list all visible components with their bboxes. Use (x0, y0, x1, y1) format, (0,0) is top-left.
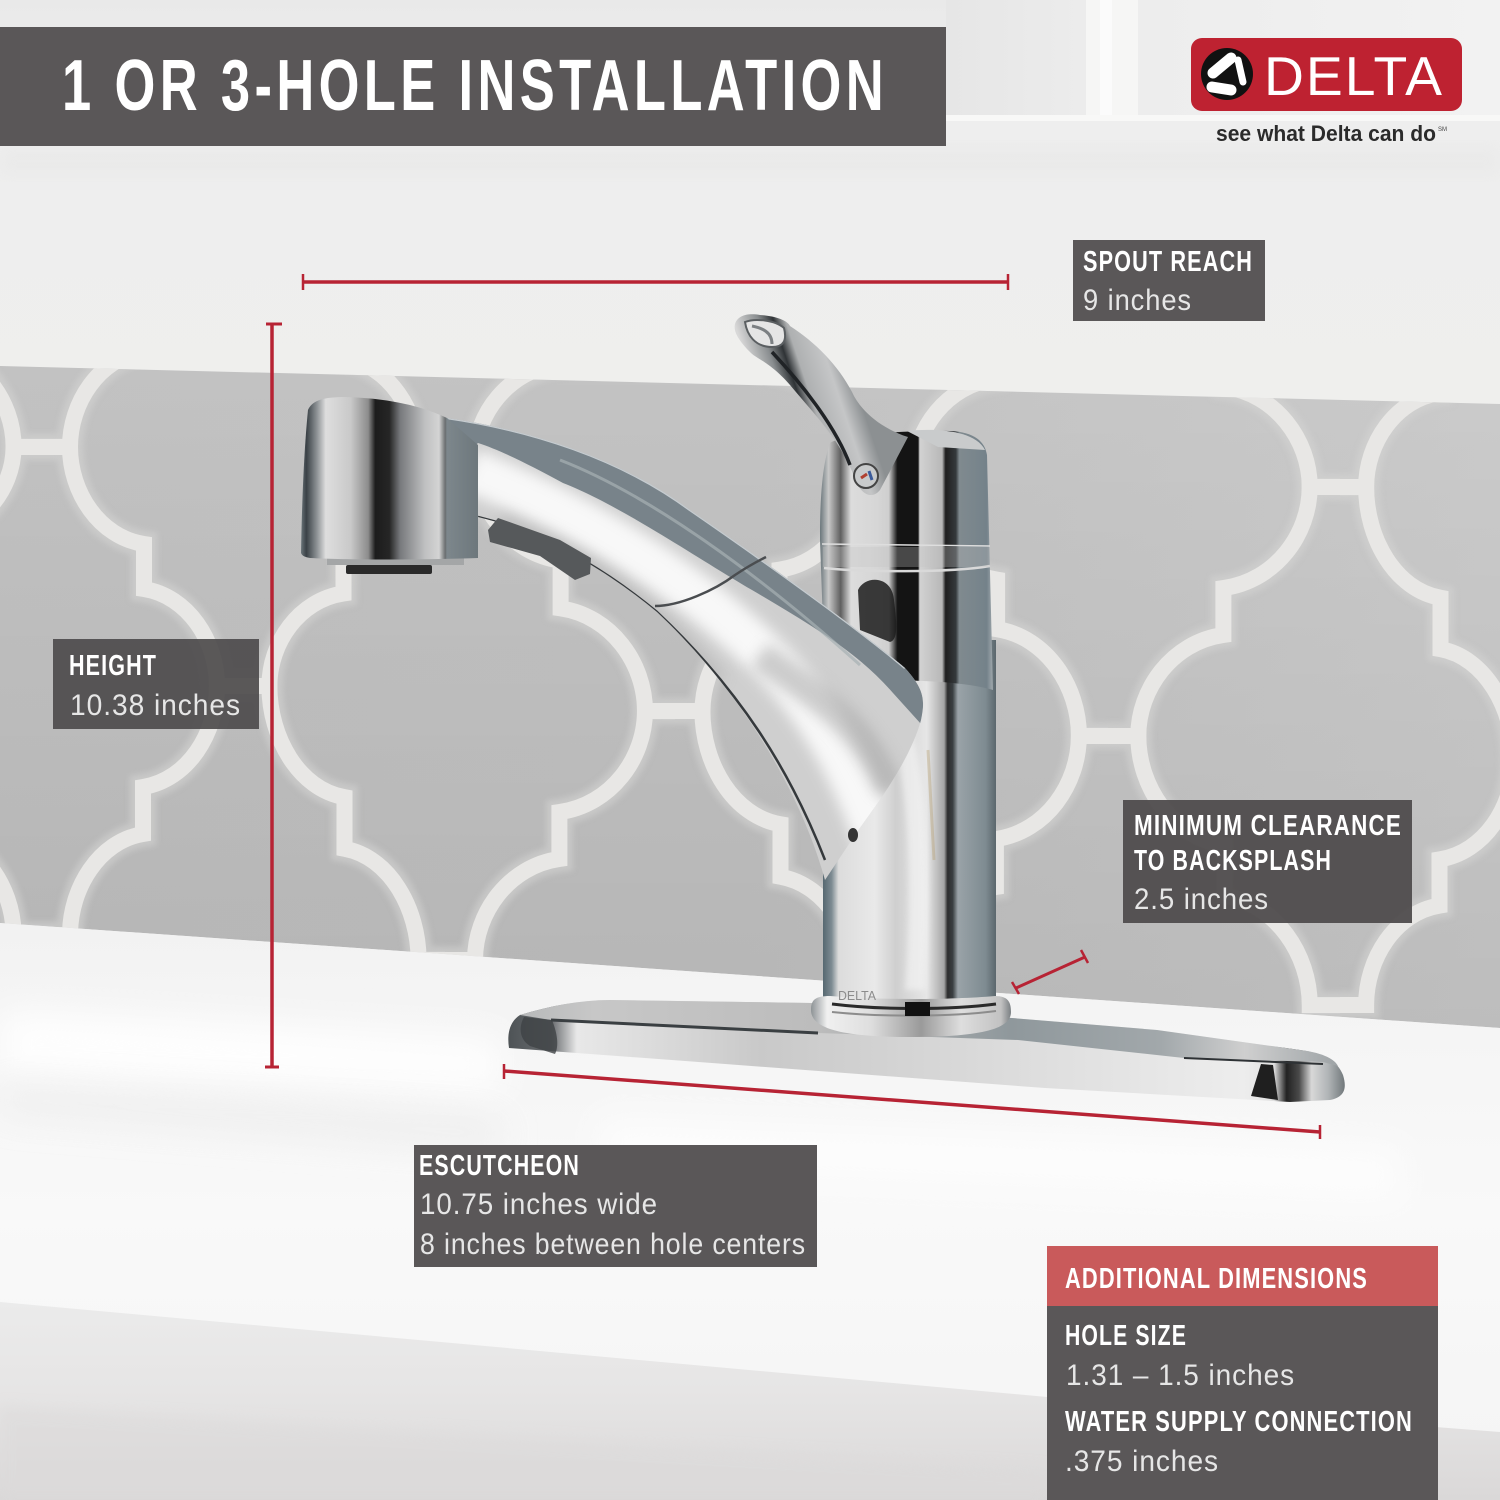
callout: spout reach: 9 inches (1083, 284, 1192, 317)
faucet pillar (823, 640, 996, 1010)
background: arabesque tile backsplash (0, 366, 1500, 1100)
callout: minimum clearance (1123, 800, 1412, 923)
faucet engraved brand: DELTA (838, 988, 876, 1003)
callout: minimum clearance: 2.5 inches (1134, 883, 1269, 916)
Delta logo (1191, 38, 1462, 111)
background: white countertop (0, 923, 1500, 1500)
callout: escutcheon: ESCUTCHEON (419, 1150, 580, 1182)
Delta tagline: see what Delta can do (1216, 121, 1436, 146)
panel body (1047, 1306, 1438, 1500)
callout: escutcheon: 8 inches between hole centers (420, 1228, 806, 1261)
panel header: ADDITIONAL DIMENSIONS (1065, 1263, 1368, 1295)
dimension line: height (265, 324, 282, 1067)
title banner (0, 27, 946, 146)
spray trigger (488, 518, 591, 580)
callout: height (53, 639, 259, 729)
spout ring seam (655, 557, 766, 606)
aerator (327, 556, 464, 574)
title banner: 1 OR 3-HOLE INSTALLATION (62, 46, 888, 126)
panel header (1047, 1246, 1438, 1306)
dimension line: escutcheon (504, 1064, 1320, 1139)
callout: escutcheon: 10.75 inches wide (420, 1188, 658, 1221)
faucet spout arm (447, 418, 923, 880)
faucet upper body and ring (820, 430, 993, 690)
dimension line: spout reach (303, 274, 1008, 290)
dimension line: clearance (1012, 950, 1088, 994)
collar (811, 996, 1011, 1037)
callout: spout reach: SPOUT REACH (1083, 246, 1253, 278)
callout: minimum clearance: MINIMUM CLEARANCE (1134, 810, 1402, 842)
panel body: HOLE SIZE (1065, 1320, 1187, 1352)
hole (848, 828, 858, 842)
callout: height: 10.38 inches (70, 689, 241, 722)
callout: height: HEIGHT (69, 650, 157, 682)
spray head (301, 397, 478, 560)
background: wall above backsplash (0, 0, 1500, 420)
Delta logo: DELTA (1264, 45, 1444, 107)
faucet handle (735, 314, 908, 495)
callout: escutcheon (414, 1145, 817, 1267)
faucet (301, 314, 1345, 1102)
panel body: .375 inches (1065, 1445, 1219, 1478)
escutcheon base plate (508, 1000, 1345, 1102)
callout: minimum clearance: TO BACKSPLASH (1134, 845, 1332, 877)
panel: additional dimensions (1047, 1246, 1438, 1500)
Delta tagline: SM (1438, 127, 1447, 133)
logo icon (1201, 48, 1253, 100)
panel body: 1.31 – 1.5 inches (1066, 1359, 1295, 1392)
callout: spout reach (1073, 240, 1265, 321)
